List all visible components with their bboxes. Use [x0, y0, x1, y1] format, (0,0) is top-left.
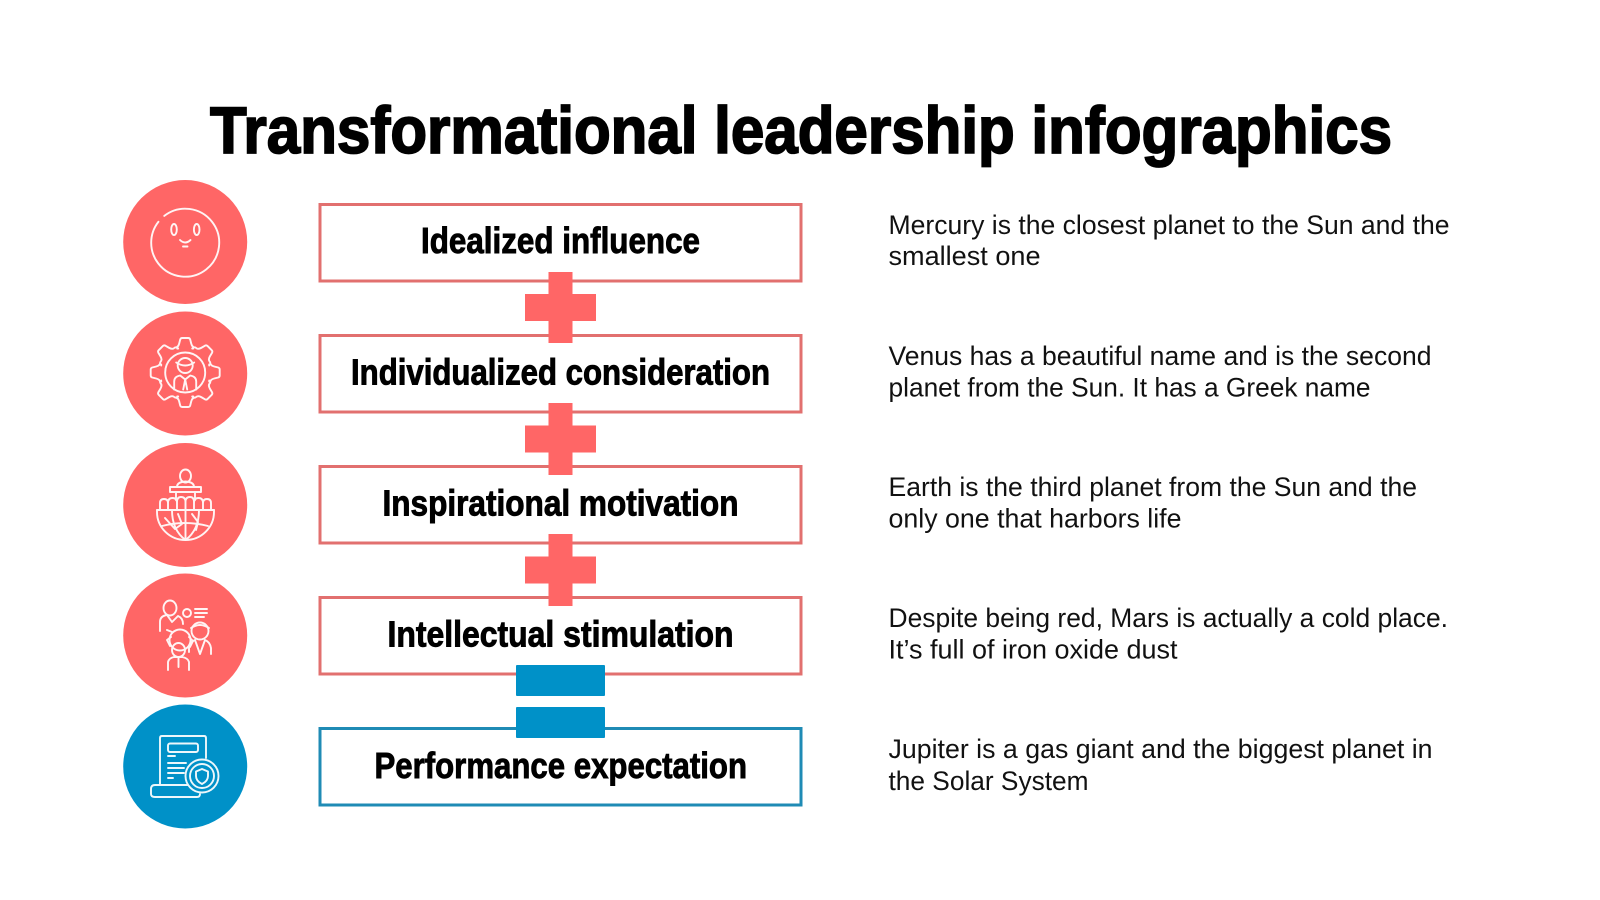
- equals sign: [516, 665, 605, 738]
- label 5: Performance expectation: [374, 745, 747, 786]
- description 2: planet from the Sun. It has a Greek name: [888, 372, 1370, 402]
- row 4: intellectual stimulation: [123, 574, 1448, 698]
- description 2: Venus has a beautiful name and is the second: [888, 341, 1432, 371]
- title: Transformational leadership infographics: [210, 93, 1392, 167]
- label 3: Inspirational motivation: [382, 482, 738, 524]
- row 2: individualized consideration: [123, 312, 1432, 436]
- description 5: the Solar System: [888, 766, 1088, 796]
- label 2: Individualized consideration: [351, 352, 770, 392]
- icon: person in gear: [151, 338, 220, 407]
- icon: smiling face: [137, 195, 233, 290]
- label box 1: [320, 204, 801, 281]
- description 1: Mercury is the closest planet to the Sun and the: [888, 210, 1450, 240]
- icon: document with shield seal: [151, 736, 218, 797]
- icon: speaker and audience on globe: [157, 470, 214, 540]
- circle badge 3: [123, 443, 247, 567]
- row 1: idealized influence: [123, 180, 1450, 304]
- label box 4: [320, 598, 801, 674]
- icon: team group: [160, 600, 211, 670]
- label box 3: [320, 466, 801, 543]
- description 5: Jupiter is a gas giant and the biggest planet in: [888, 734, 1432, 764]
- label box 2: [320, 336, 801, 412]
- description 3: Earth is the third planet from the Sun and the: [888, 472, 1417, 502]
- label 4: Intellectual stimulation: [388, 614, 734, 654]
- description 4: It’s full of iron oxide dust: [888, 634, 1178, 664]
- circle badge 2: [123, 312, 247, 436]
- description 4: Despite being red, Mars is actually a cold place.: [888, 603, 1448, 633]
- description 3: only one that harbors life: [888, 504, 1182, 534]
- label box 5: [320, 728, 801, 805]
- row 5: performance expectation: [123, 704, 1433, 828]
- plus sign 1: [525, 272, 596, 343]
- plus sign 2: [525, 403, 596, 475]
- circle badge 4: [123, 574, 247, 698]
- description 1: smallest one: [888, 241, 1040, 271]
- circle badge 5: [123, 704, 247, 828]
- row 3: inspirational motivation: [123, 443, 1417, 567]
- plus sign 3: [525, 534, 596, 606]
- label 1: Idealized influence: [421, 220, 700, 261]
- circle badge 1: [123, 180, 247, 304]
